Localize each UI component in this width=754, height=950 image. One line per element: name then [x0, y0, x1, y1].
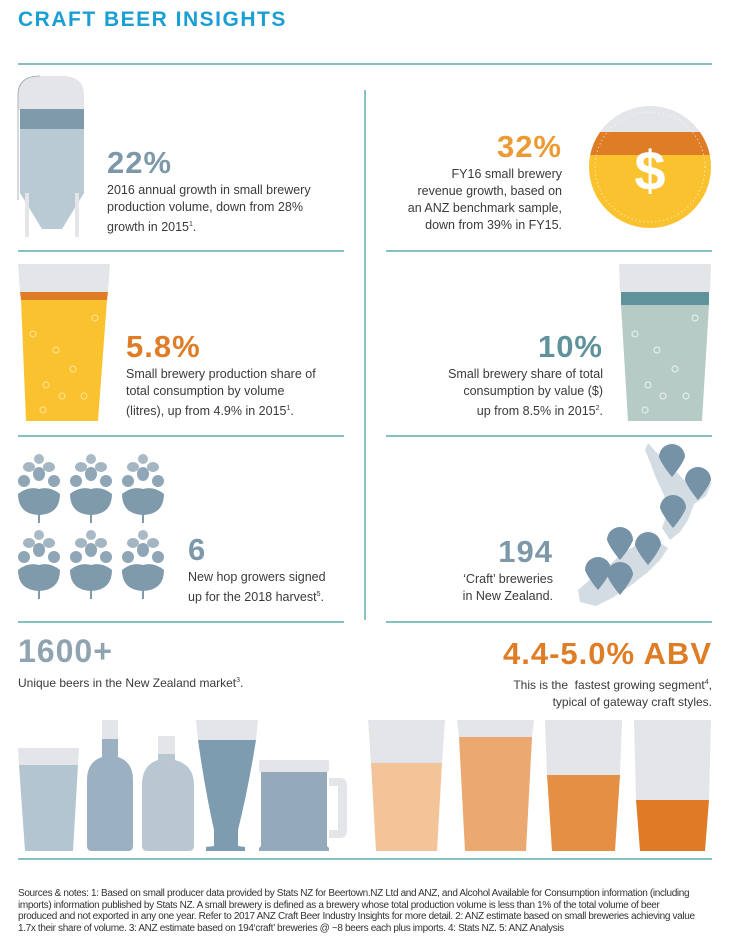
stat: 6: New hop growers signed [188, 570, 326, 584]
stat: 22% [107, 145, 311, 234]
stat: 10%: Small brewery share of total [448, 367, 603, 381]
stat: 5.8%: 5.8% [126, 329, 201, 364]
stat: 22%: production volume, down from 28% [107, 200, 303, 214]
stat: 32%: down from 39% in FY15. [425, 218, 562, 232]
footnotes: Sources & notes: 1: Based on small producer data provided by Stats NZ for Beertown.NZ Ltd and ANZ, and Alcohol Available for Consumption information (including [18, 888, 689, 899]
stat: 5.8%: (litres), up from 4.9% in 20151. [126, 404, 294, 418]
icon: fermentation tank [18, 76, 84, 237]
stat: 4.4-5.0% ABV: This is the fastest growing segment4, [513, 678, 712, 692]
stat: 32%: an ANZ benchmark sample, [408, 201, 562, 215]
icon: sage beer glass [619, 264, 711, 421]
stat: 4.4-5.0% ABV: typical of gateway craft styles. [553, 695, 712, 709]
stat: 6: 6 [188, 532, 206, 567]
icon: coin: $ [634, 139, 666, 202]
stat: 10%: 10% [538, 329, 603, 364]
icon: six hops [18, 454, 164, 599]
stat: 194: ‘Craft’ breweries [463, 572, 553, 586]
icon: yellow beer glass [18, 264, 110, 421]
stat: 10% [448, 329, 603, 418]
stat: 32%: revenue growth, based on [417, 184, 562, 198]
footnotes: 1.7x their share of volume. 3: ANZ estimate based on 194‘craft’ breweries @ ~8 beers each plus imports. 4: Stats NZ. 5: ANZ Analysis [18, 923, 564, 934]
stat: 22%: 2016 annual growth in small brewery [107, 183, 311, 197]
stat: 1600+: 1600+ [18, 633, 113, 669]
stat: 32%: 32% [497, 129, 562, 164]
stat: 5.8% [126, 329, 316, 418]
stat: 32% [408, 129, 562, 232]
stat: 194: 194 [498, 534, 553, 569]
illustration: blue beer vessels [18, 720, 347, 851]
footnotes [18, 888, 695, 934]
stat: 5.8%: Small brewery production share of [126, 367, 316, 381]
stat: 1600+ [18, 633, 243, 690]
stat: 10%: consumption by value ($) [463, 384, 603, 398]
footnotes: produced and not exported in any one year. Refer to 2017 ANZ Craft Beer Industry Insights for more detail. 2: ANZ estimate based on small breweries achieving value [18, 911, 695, 922]
stat: 5.8%: total consumption by volume [126, 384, 284, 398]
icon: New Zealand map with pins [578, 443, 712, 606]
stat: 6: up for the 2018 harvest5. [188, 590, 324, 604]
stat: 6 [188, 532, 326, 604]
footnotes: imports) information published by Stats NZ. A small brewery is defined as a brewery whose total production volume is less than 1% of the total volume of beer [18, 900, 660, 911]
stat: 194: in New Zealand. [463, 589, 553, 603]
stat: 32%: FY16 small brewery [452, 167, 562, 181]
stat: 22%: 22% [107, 145, 172, 180]
stat: 1600+: Unique beers in the New Zealand market3. [18, 676, 243, 690]
title: CRAFT BEER INSIGHTS [18, 8, 287, 31]
stat: 4.4-5.0% ABV: 4.4-5.0% ABV [503, 636, 712, 671]
stat: 10%: up from 8.5% in 20152. [477, 404, 603, 418]
illustration: orange ABV glasses [368, 720, 711, 851]
stat: 22%: growth in 20151. [107, 220, 196, 234]
icon: coin [589, 106, 711, 228]
stat: 4.4-5.0% ABV [503, 636, 712, 709]
stat: 194 [463, 534, 553, 603]
